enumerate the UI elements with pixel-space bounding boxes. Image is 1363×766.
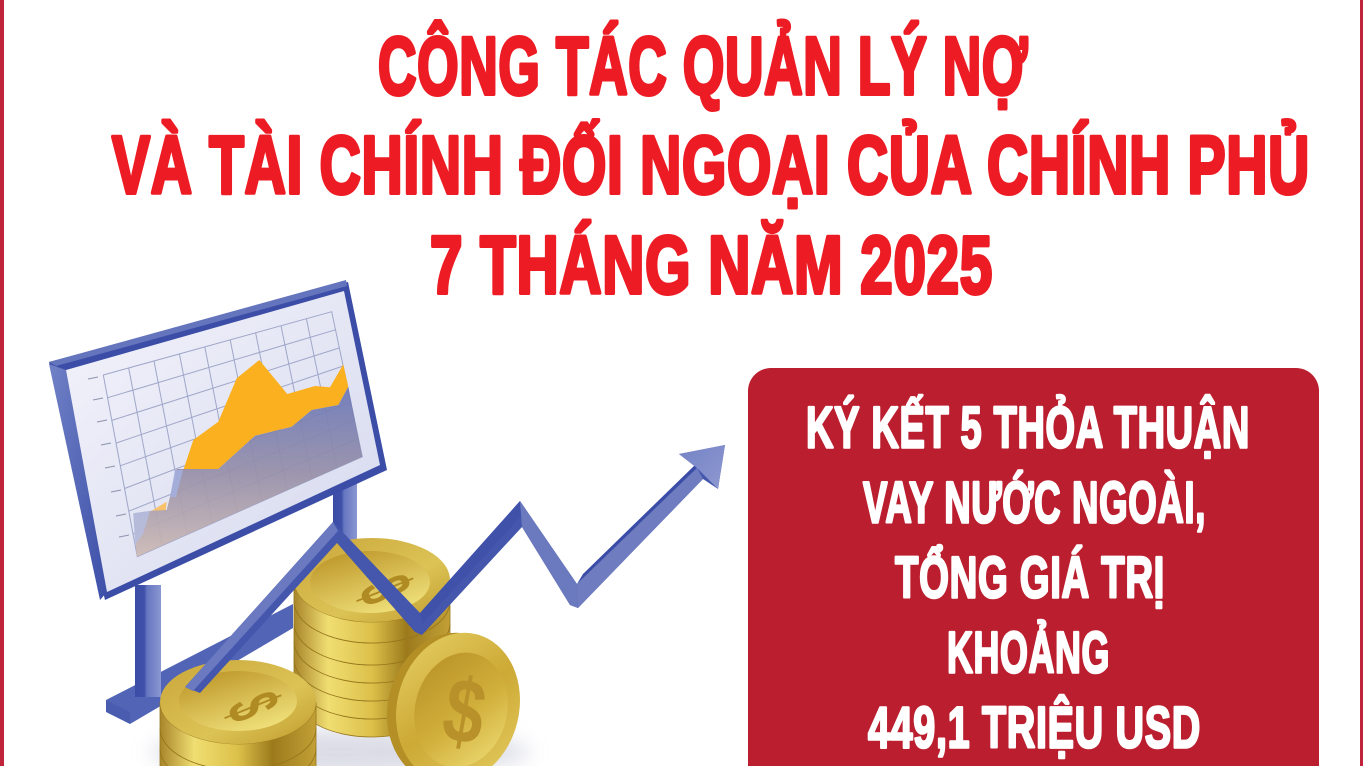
blue area series — [133, 387, 362, 557]
coin stack — [294, 538, 450, 737]
panel line 5: 449,1 TRIỆU USD — [868, 696, 1201, 760]
chart grid — [88, 312, 362, 557]
coin shadow — [150, 730, 530, 766]
panel line 4: KHOẢNG — [947, 620, 1110, 686]
rising arrow — [185, 445, 725, 693]
right standing coin — [371, 619, 536, 766]
left page border — [0, 0, 4, 766]
title — [112, 21, 1310, 311]
right page border — [1360, 0, 1363, 766]
panel text — [806, 396, 1250, 760]
title line 1: CÔNG TÁC QUẢN LÝ NỢ — [378, 21, 1028, 112]
panel line 3: TỔNG GIÁ TRỊ — [895, 546, 1165, 610]
illustration: chart board, coins and arrow — [49, 280, 725, 766]
board screen — [66, 291, 380, 592]
left coin — [160, 660, 316, 766]
dollar on stack coin: $ — [343, 565, 427, 614]
title line 3: 7 THÁNG NĂM 2025 — [430, 220, 993, 311]
orange area series — [152, 360, 348, 511]
chart board — [49, 280, 387, 600]
board frame — [49, 282, 387, 600]
dollar on left coin: $ — [211, 682, 295, 731]
board stand — [106, 480, 357, 724]
panel background — [748, 368, 1319, 766]
dollar on right coin: $ — [436, 659, 493, 765]
callout panel — [748, 368, 1319, 766]
